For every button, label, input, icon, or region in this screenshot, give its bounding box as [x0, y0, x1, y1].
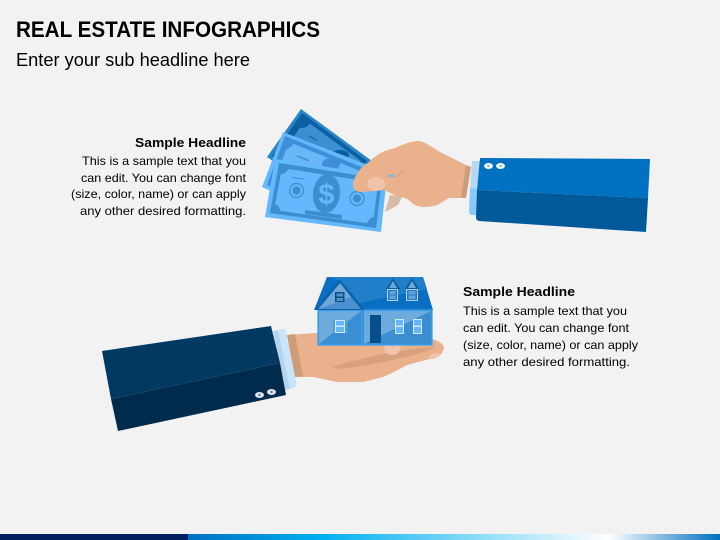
door: [370, 315, 381, 343]
icon: back banknote: [267, 109, 371, 164]
icon: blue sleeve: [476, 158, 650, 232]
text block: top left: can edit. You can change font: [81, 171, 247, 185]
text block: lower right: any other desired formatting.: [463, 355, 630, 369]
text block: lower right: This is a sample text that you: [463, 304, 627, 318]
text block: lower right: can edit. You can change font: [463, 321, 630, 335]
text block: top left: [71, 135, 247, 218]
icon: front banknote: [265, 158, 387, 233]
text block: lower right: Sample Headline: [463, 284, 575, 299]
gable window: [335, 292, 344, 302]
icon: money hand: [353, 141, 471, 212]
text block: lower right: [463, 284, 638, 369]
icon: cuff: [273, 329, 297, 390]
walls: [318, 310, 432, 345]
icon: front banknote: $: [318, 179, 335, 211]
text block: top left: (size, color, name) or can apply: [71, 187, 246, 201]
dormers: [386, 278, 400, 289]
text block: top left: any other desired formatting.: [80, 204, 246, 218]
title: REAL ESTATE INFOGRAPHICS: [16, 17, 320, 42]
footer bar: [0, 534, 720, 540]
illustration: hand holding money: [262, 109, 650, 233]
icon: open hand: [287, 333, 444, 382]
icon: middle banknote: [262, 132, 366, 190]
icon: navy sleeve: [102, 326, 286, 431]
roof: [314, 277, 433, 310]
icon: house: [314, 277, 433, 345]
gable: [314, 280, 365, 310]
illustration: hand holding house: [102, 277, 444, 431]
text block: top left: Sample Headline: [135, 135, 246, 150]
icon: blue cuff: [469, 161, 480, 215]
text block: top left: This is a sample text that you: [82, 154, 246, 168]
wall windows: [333, 320, 347, 333]
text block: lower right: (size, color, name) or can apply: [463, 338, 638, 352]
subtitle: Enter your sub headline here: [16, 50, 250, 70]
